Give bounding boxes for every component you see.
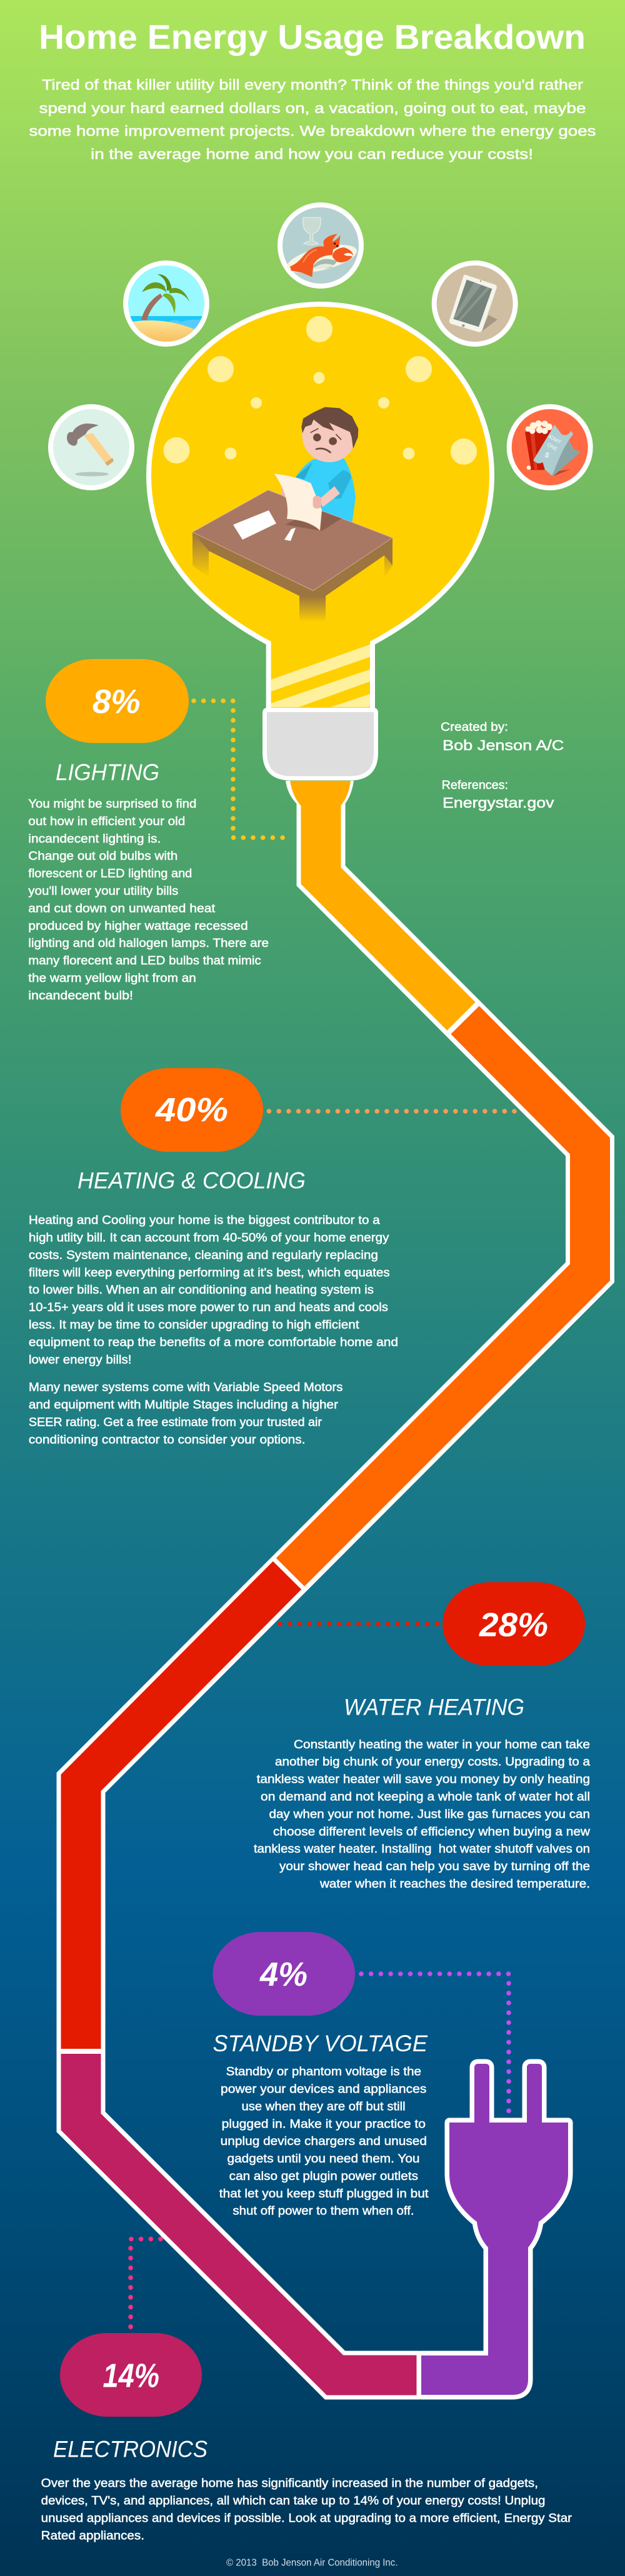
- text: standby voltage: [219, 2066, 429, 2217]
- icon: palm tree beach: [123, 260, 209, 347]
- intro paragraph: in the average home and how you can reduce your costs!: [91, 146, 533, 162]
- cord segment: water heating: [81, 1575, 288, 2049]
- leader dots: electronics: [131, 2239, 161, 2328]
- intro paragraph: spend your hard earned dollars on, a vacation, going out to eat, maybe: [39, 100, 586, 116]
- desk: [192, 490, 392, 622]
- text: heating and cooling: high utlity bill. It can account from 40-50% of your home energy: [29, 1232, 389, 1244]
- text: electronics: Rated appliances.: [41, 2530, 144, 2542]
- badge: 4%: [212, 1932, 355, 2016]
- credits: References:: [442, 779, 508, 792]
- text: lighting: incandecent lighting is.: [28, 833, 161, 846]
- text: water heating: choose different levels of efficiency when buying a new: [273, 1825, 590, 1838]
- cord segment: electronics: [81, 2054, 416, 2375]
- badge: 40%: [121, 1068, 263, 1152]
- text: water heating: Constantly heating the water in your home can take: [294, 1738, 590, 1751]
- leader dots: heating: [269, 1109, 514, 1114]
- text: heating and cooling: Many newer systems come with Variable Speed Motors: [29, 1381, 343, 1394]
- badge: 4%: 4%: [259, 1956, 308, 1993]
- text: water heating: your shower head can help you save by turning off the: [279, 1860, 590, 1873]
- text: electronics: devices, TV's, and appliances, all which can take up to 14% of your energy costs! Unplug: [41, 2495, 545, 2508]
- text: standby voltage: that let you keep stuff plugged in but: [219, 2187, 429, 2201]
- text: heating and cooling: equipment to reap the benefits of a more comfortable home and: [29, 1336, 398, 1349]
- leader dots: water: [280, 1622, 438, 1627]
- leader dots: standby: [361, 1974, 509, 2111]
- text: heating and cooling: costs. System maintenance, cleaning and regularly replacing: [29, 1249, 378, 1262]
- text: heating and cooling: less. It may be time to consider upgrading to high efficient: [29, 1319, 359, 1332]
- torn envelope: [233, 510, 296, 541]
- credits: Energystar.gov: [442, 795, 554, 811]
- cord white outline: [81, 803, 590, 2375]
- text: heating and cooling: and equipment with Multiple Stages including a higher: [29, 1399, 339, 1412]
- badge: 8%: [46, 659, 189, 743]
- icon: movie tickets and popcorn: [507, 404, 593, 490]
- cord segment: heating and cooling: [290, 1020, 590, 1572]
- heading: standby voltage: STANDBY VOLTAGE: [212, 2031, 428, 2056]
- badge: 14%: [60, 2333, 202, 2417]
- copyright: © 2013 Bob Jenson Air Conditioning Inc.: [226, 2558, 398, 2569]
- icon: movie tickets and popcorn: ONE: [546, 442, 558, 452]
- text: heating and cooling: lower energy bills!: [29, 1354, 132, 1367]
- text: lighting: many florecent and LED bulbs that mimic: [28, 954, 261, 968]
- intro paragraph: Tired of that killer utility bill every month? Think of the things you'd rather: [42, 76, 583, 92]
- text: water heating: day when your not home. Just like gas furnaces you can: [269, 1808, 590, 1821]
- credits: Bob Jenson A/C: [442, 737, 564, 753]
- text: lighting: you'll lower your utility bills: [28, 884, 178, 898]
- text: water heating: tankless water heater. Installing hot water shutoff valves on: [254, 1843, 590, 1856]
- text: lighting: produced by higher wattage recessed: [28, 919, 248, 933]
- text: water heating: water when it reaches the desired temperature.: [319, 1878, 590, 1891]
- icon: tablet: [432, 260, 518, 347]
- title: Home Energy Usage Breakdown: [39, 17, 586, 56]
- text: heating and cooling: conditioning contractor to consider your options.: [29, 1434, 306, 1447]
- text: electronics: unused appliances and devices if possible. Look at upgrading to a more efficient, Energy Star: [41, 2512, 572, 2525]
- text: water heating: on demand and not keeping a whole tank of water hot all: [261, 1790, 590, 1804]
- badge: 28%: [442, 1582, 585, 1666]
- cord segment: lighting: [290, 781, 461, 1016]
- text: standby voltage: use when they are off but still: [241, 2100, 406, 2113]
- credits: Created by:: [441, 721, 508, 734]
- text: lighting: lighting and old hallogen lamps. There are: [28, 937, 269, 950]
- plug and standby segment: [421, 2064, 568, 2395]
- text: heating and cooling: filters will keep everything performing at it's best, which equates: [29, 1266, 390, 1279]
- bulb sparkle dots: [164, 316, 477, 465]
- text: lighting: the warm yellow light from an: [28, 972, 196, 985]
- text: lighting: and cut down on unwanted heat: [28, 902, 216, 915]
- text: standby voltage: Standby or phantom voltage is the: [226, 2066, 421, 2079]
- bulb neck stripes: [271, 645, 370, 707]
- text: water heating: another big chunk of your energy costs. Upgrading to a: [275, 1756, 590, 1769]
- intro paragraph: [29, 76, 596, 162]
- bulb base: [265, 710, 376, 778]
- text: standby voltage: shut off power to them when off.: [232, 2205, 414, 2217]
- badge: 40%: 40%: [155, 1091, 228, 1129]
- heading: water heating: WATER HEATING: [344, 1695, 524, 1720]
- intro paragraph: some home improvement projects. We breakdown where the energy goes: [29, 122, 596, 139]
- text: electronics: Over the years the average home has significantly increased in the number of gadgets,: [41, 2477, 538, 2490]
- text: electronics: [41, 2477, 572, 2542]
- text: standby voltage: can also get plugin power outlets: [229, 2170, 418, 2183]
- heading: lighting: LIGHTING: [56, 760, 159, 785]
- text: water heating: [254, 1738, 590, 1891]
- badge: 14%: 14%: [102, 2357, 159, 2395]
- leader dots: lighting: [194, 701, 292, 838]
- text: heating and cooling: SEER rating. Get a free estimate from your trusted air: [29, 1416, 322, 1429]
- badge: 8%: 8%: [92, 683, 140, 721]
- text: standby voltage: unplug device chargers and unused: [221, 2135, 427, 2148]
- text: heating and cooling: to lower bills. When an air conditioning and heating system is: [29, 1284, 374, 1297]
- text: lighting: florescent or LED lighting and: [28, 868, 192, 881]
- boy reading bill at desk: [192, 407, 392, 622]
- text: heating and cooling: [29, 1214, 398, 1447]
- text: lighting: Change out old bulbs with: [28, 850, 178, 863]
- credits: [441, 721, 564, 811]
- light bulb: [151, 307, 489, 778]
- text: lighting: [28, 798, 269, 1003]
- heading: electronics: ELECTRONICS: [53, 2436, 208, 2462]
- icon: movie tickets and popcorn: $: [544, 452, 551, 460]
- bulb glass: [151, 307, 489, 708]
- text: lighting: incandecent bulb!: [28, 989, 133, 1003]
- text: water heating: tankless water heater will save you money by only heating: [257, 1773, 590, 1786]
- icon: movie tickets and popcorn: ADMIT: [548, 433, 562, 445]
- text: lighting: You might be surprised to find: [28, 798, 196, 811]
- text: standby voltage: gadgets until you need them. You: [228, 2152, 420, 2166]
- text: lighting: out how in efficient your old: [28, 815, 185, 828]
- icon: hammer: [48, 404, 134, 490]
- text: standby voltage: power your devices and appliances: [221, 2083, 426, 2096]
- text: heating and cooling: Heating and Cooling your home is the biggest contributor to a: [29, 1214, 380, 1227]
- energy cord: [81, 781, 590, 2375]
- heading: heating and cooling: HEATING & COOLING: [78, 1168, 306, 1194]
- badge: 28%: 28%: [479, 1606, 548, 1643]
- socket collar: [286, 781, 354, 804]
- text: standby voltage: plugged in. Make it your practice to: [222, 2118, 426, 2131]
- text: heating and cooling: 10-15+ years old it uses more power to run and heats and cools: [29, 1301, 388, 1314]
- hands and bill: [274, 473, 342, 531]
- boy: [296, 407, 358, 523]
- icon: lobster dinner: [278, 202, 364, 289]
